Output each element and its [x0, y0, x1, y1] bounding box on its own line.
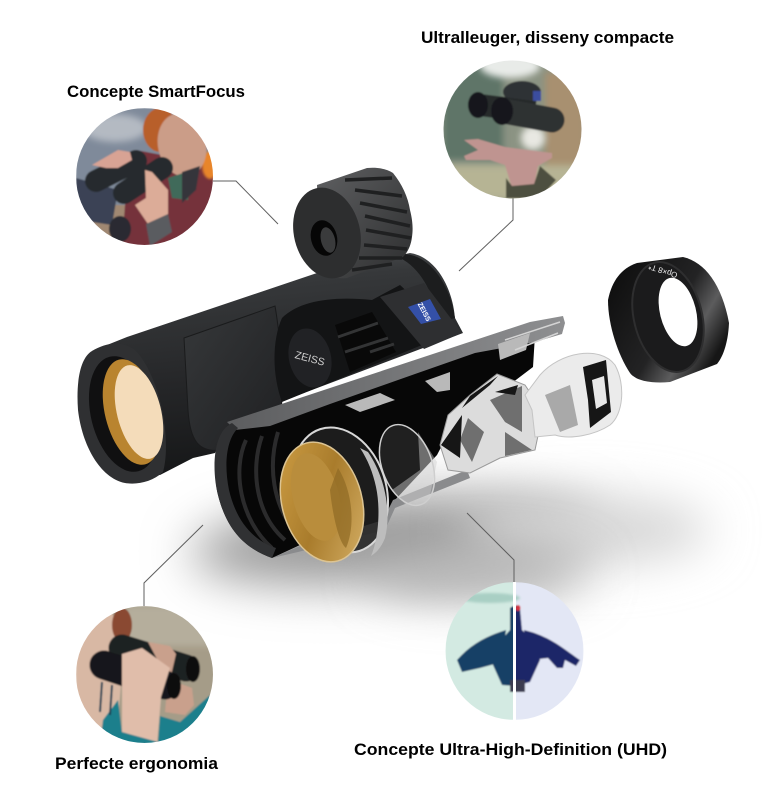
face: [76, 614, 122, 728]
focus knob: [284, 168, 413, 286]
lens cluster glass: [525, 353, 622, 437]
prism body: [440, 374, 543, 473]
background: [112, 606, 213, 742]
bird right: [515, 605, 540, 686]
cluster grey: [545, 385, 578, 432]
cuff: [146, 214, 172, 246]
internal brackets: [345, 333, 530, 412]
left hand: [92, 150, 132, 168]
strap: [100, 682, 112, 715]
heading: SmartFocus: Concepte SmartFocus: [67, 83, 245, 101]
ring body: [608, 257, 729, 383]
heading: ultralight: Ultralleuger, disseny compacte: [421, 29, 674, 47]
central light: [521, 126, 545, 150]
line: UHD: [467, 513, 514, 582]
ZEISS lettering: ZEISS: [294, 349, 326, 369]
sleeve: [76, 178, 118, 225]
orange edge: [200, 150, 213, 180]
line: ultralight: [459, 197, 513, 271]
prism dark facets: [441, 376, 518, 458]
front barrel: [503, 111, 552, 120]
near barrel: [104, 665, 165, 685]
rear barrel: [480, 105, 535, 112]
heading: UHD: Concepte Ultra-High-Definition (UHD): [354, 741, 667, 759]
gold flare: [330, 468, 352, 548]
gold highlight: [282, 448, 350, 546]
ground blur: [443, 165, 583, 200]
near hand: [122, 648, 170, 745]
lower left: [93, 204, 126, 237]
left wing: [457, 630, 506, 672]
floor shadow: [187, 482, 710, 599]
glass fill: [392, 432, 437, 504]
feet: [510, 680, 525, 692]
photo: SmartFocus: [76, 108, 218, 247]
comb: [516, 605, 520, 611]
knob ridges: [345, 178, 411, 270]
hair: [112, 608, 132, 642]
eyecup rim: [215, 423, 276, 558]
top blur: [126, 607, 206, 646]
binocular wheel: [503, 81, 541, 103]
focus housing: [274, 285, 438, 402]
photo: ultralight: [443, 54, 585, 200]
background: [76, 108, 208, 206]
lavender half: [514, 582, 584, 720]
jacket: [122, 150, 214, 246]
clear lens: [369, 417, 445, 513]
eyecup ribs: [239, 432, 297, 548]
logo lettering: ZEISS: [416, 302, 432, 323]
right wing: [524, 630, 580, 668]
right hand: [135, 170, 168, 226]
photo content: [76, 108, 218, 247]
binocular barrels: [96, 161, 162, 193]
photo: UHD comparison: [445, 582, 584, 720]
left foliage: [443, 60, 503, 160]
jacket: [100, 695, 214, 744]
lower housing band: [272, 470, 470, 558]
top light: [480, 54, 540, 78]
barrel body: [92, 253, 463, 475]
rocks: [83, 114, 147, 142]
rear lens disc: [369, 417, 445, 513]
interior: [215, 335, 535, 558]
divider: [513, 582, 516, 720]
photo content: [443, 54, 585, 200]
ring opening: [652, 274, 704, 350]
inner rim: [78, 349, 170, 479]
cutaway barrel: [215, 316, 565, 558]
focus rollers: [335, 312, 396, 372]
eyepiece ring: [608, 254, 729, 383]
near lens: [167, 673, 181, 699]
gold lens group: [268, 415, 404, 571]
binoculars main barrel: [92, 253, 463, 475]
ring lettering: Op×8 T*: [647, 262, 679, 280]
cluster highlight: [592, 376, 607, 409]
blue badge: [533, 91, 541, 101]
top edge fragments: [505, 322, 560, 350]
far hand: [148, 642, 194, 715]
prism: [440, 374, 543, 473]
lens: [491, 97, 513, 125]
far barrel: [122, 648, 186, 668]
knob drum: [317, 168, 413, 278]
face: [156, 114, 208, 176]
photo content: [76, 606, 215, 745]
line: SmartFocus: [213, 181, 278, 224]
strap: [182, 166, 200, 203]
eyepiece shading: [400, 254, 455, 322]
mint half: [445, 582, 515, 720]
silver edge: [360, 448, 388, 556]
knob hole: [307, 217, 341, 259]
horizon: [460, 593, 520, 603]
photo content: [445, 582, 584, 720]
bird left: [493, 605, 515, 686]
side panel: [184, 306, 282, 450]
ring inner wall: [621, 254, 715, 380]
background: [443, 60, 583, 200]
right foliage: [543, 70, 582, 167]
amber coating: [93, 353, 171, 471]
knob hole highlight: [318, 226, 338, 254]
sleeve: [506, 166, 556, 198]
heading: ergonomics: Perfecte ergonomia: [55, 755, 219, 773]
lower binocular: [109, 216, 131, 242]
saddle band: [380, 283, 462, 349]
connector lines: [144, 181, 514, 606]
lens cluster dark barrel: [583, 360, 611, 428]
far lens: [186, 656, 200, 682]
lens: [468, 92, 488, 118]
scarf: [168, 172, 189, 201]
ZEISS cap: [282, 324, 338, 392]
hair: [142, 109, 172, 152]
top housing band: [227, 316, 565, 430]
objective lens rim: [78, 344, 172, 484]
photo: ergonomics: [76, 606, 215, 745]
blue logo: [408, 299, 441, 324]
glass ring: [276, 415, 404, 565]
hand: [464, 139, 552, 188]
pale glass: [106, 360, 172, 464]
prism facets: [460, 386, 532, 462]
knob face: [284, 180, 370, 286]
line: ergonomics: [144, 525, 203, 606]
rear lens cluster: [525, 353, 622, 437]
outer rim: [78, 344, 166, 484]
gold lens: [268, 433, 376, 571]
